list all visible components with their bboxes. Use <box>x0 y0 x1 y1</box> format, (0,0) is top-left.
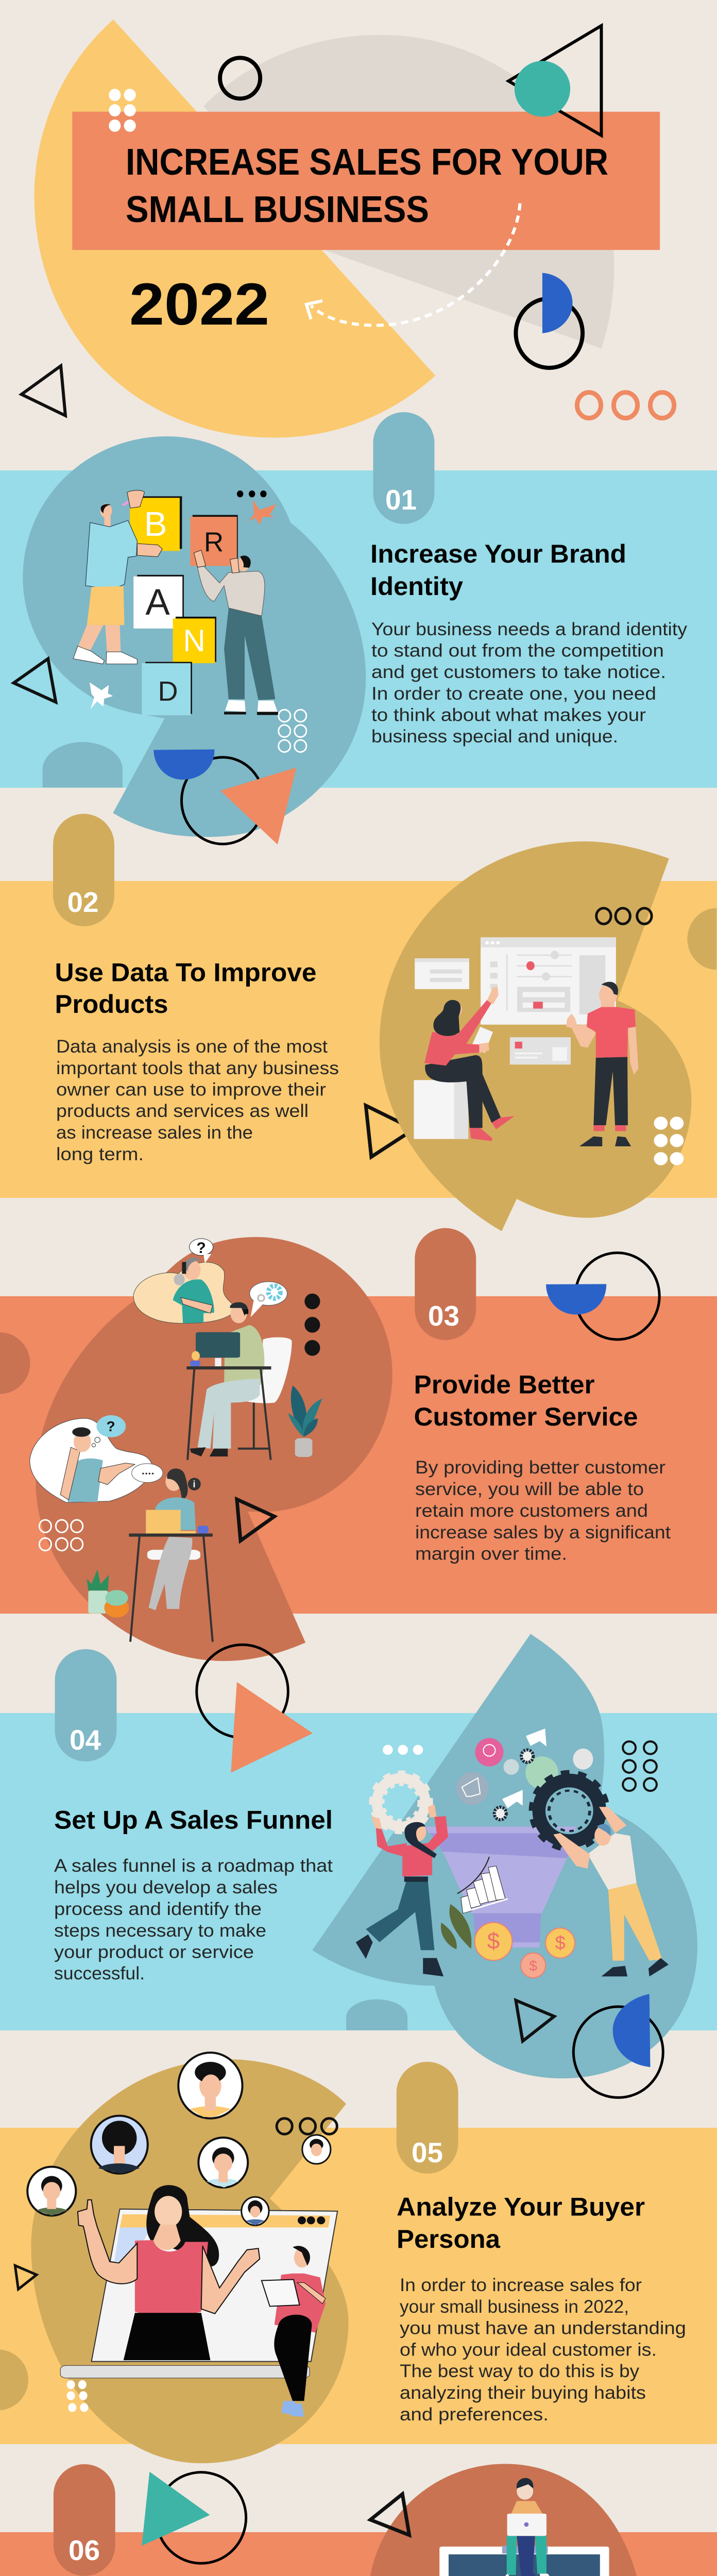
body text <box>400 2275 686 2425</box>
title: SMALL BUSINESS <box>126 189 429 230</box>
body text: to stand out from the competition <box>371 641 664 660</box>
body text: In order to increase sales for <box>400 2275 642 2295</box>
body text: products and services as well <box>56 1101 309 1121</box>
heading <box>397 2193 645 2253</box>
illustration: woman lifting gear <box>356 1804 448 1976</box>
heading: Use Data To Improve <box>55 958 316 987</box>
band: section 6 <box>0 2532 717 2576</box>
band: section 5 <box>0 2128 717 2444</box>
illustration: agent with laptop <box>87 1468 213 1642</box>
body text: increase sales by a significant <box>415 1522 671 1543</box>
speech bubble marks: i <box>193 1479 196 1489</box>
body text: and preferences. <box>400 2404 549 2425</box>
body text: your product or service <box>54 1942 254 1962</box>
letters on blocks: R <box>204 527 224 557</box>
number 06: 06 <box>69 2534 100 2566</box>
panel: section 4 sales funnel <box>54 1634 697 2097</box>
panel: section 3 customer service <box>0 1228 671 1661</box>
body text: successful. <box>54 1963 145 1984</box>
letters on blocks: D <box>158 676 178 707</box>
body text: to think about what makes your <box>371 705 646 725</box>
heading: Set Up A Sales Funnel <box>54 1805 333 1834</box>
heading: Identity <box>370 572 463 601</box>
body text: important tools that any business <box>56 1058 339 1078</box>
band: section 2 <box>0 881 717 1198</box>
heading: Products <box>55 990 168 1019</box>
number 03: 03 <box>428 1300 459 1332</box>
illustration: dashboard panels <box>414 937 616 1139</box>
illustration: funnel <box>425 1826 576 1947</box>
heading: Increase Your Brand <box>370 539 626 568</box>
band: section 4 <box>0 1713 717 2030</box>
section 5 shapes <box>0 2053 458 2463</box>
speech bubble marks: ? <box>106 1418 115 1434</box>
illustration: man lifting gear <box>553 1807 669 1976</box>
illustration: woman presenter <box>78 2185 260 2360</box>
number 01: 01 <box>385 484 417 516</box>
illustration: man holding letters <box>73 490 182 664</box>
icon: avatars <box>27 2053 331 2225</box>
body text: Your business needs a brand identity <box>371 619 688 639</box>
illustration: letter blocks <box>133 515 238 715</box>
letters on blocks <box>144 505 224 707</box>
body text: process and identify the <box>54 1899 262 1919</box>
body text <box>371 619 688 747</box>
body text: business special and unique. <box>371 726 618 747</box>
illustration: woman seated <box>424 987 515 1141</box>
body text <box>415 1458 671 1564</box>
illustration: man in sweater <box>194 550 278 715</box>
body text: In order to create one, you need <box>371 684 656 704</box>
coin dollar signs: $ <box>529 1958 537 1974</box>
body text: Data analysis is one of the most <box>56 1037 328 1057</box>
title <box>126 142 608 337</box>
illustration: older customer on phone <box>133 1239 238 1323</box>
speech bubble marks: ? <box>196 1240 206 1257</box>
body text: owner can use to improve their <box>56 1080 326 1099</box>
body text: of who your ideal customer is. <box>400 2340 657 2360</box>
body text: retain more customers and <box>415 1501 648 1521</box>
heading <box>55 958 316 1019</box>
body text: margin over time. <box>415 1544 567 1564</box>
section 6 shapes <box>54 2464 716 2576</box>
heading: Customer Service <box>414 1402 638 1431</box>
heading: Persona <box>397 2225 501 2253</box>
body text <box>54 1856 333 1984</box>
body text: service, you will be able to <box>415 1479 644 1499</box>
panel: section 6 marketing strategy <box>54 2464 716 2576</box>
panel: header <box>22 20 674 437</box>
illustration: laptop <box>60 2209 337 2378</box>
illustration: person on laptop <box>499 2478 556 2576</box>
letters on blocks: N <box>183 623 206 658</box>
body text: steps necessary to make <box>54 1921 266 1941</box>
illustration: tablet <box>439 2546 704 2576</box>
illustration: man standing <box>566 982 638 1146</box>
number 05: 05 <box>412 2137 443 2168</box>
body text: and get customers to take notice. <box>371 662 666 682</box>
section 1 shapes <box>14 412 434 844</box>
heading: Analyze Your Buyer <box>397 2193 645 2222</box>
heading <box>370 539 626 601</box>
illustration: floating icons <box>377 1728 599 1841</box>
body text: The best way to do this is by <box>400 2361 640 2381</box>
coin dollar signs: $ <box>487 1928 500 1954</box>
header shapes <box>22 20 674 437</box>
number 04: 04 <box>70 1724 101 1756</box>
heading: Provide Better <box>414 1370 594 1399</box>
body text: you must have an understanding <box>400 2318 686 2338</box>
coin dollar signs <box>487 1928 566 1974</box>
panel: section 5 buyer persona <box>0 2053 686 2463</box>
body text: By providing better customer <box>415 1458 665 1478</box>
section 4 shapes <box>55 1634 697 2097</box>
body text: analyzing their buying habits <box>400 2383 646 2403</box>
panel: section 2 data <box>53 814 716 1231</box>
speech bubble marks <box>106 1240 206 1489</box>
illustration: bar chart <box>457 1857 507 1913</box>
heading <box>414 1370 638 1431</box>
coin dollar signs: $ <box>555 1932 566 1953</box>
body text: helps you develop a sales <box>54 1877 278 1897</box>
body text: as increase sales in the <box>56 1123 253 1143</box>
body text: long term. <box>56 1144 144 1164</box>
title: INCREASE SALES FOR YOUR <box>126 142 608 183</box>
band: section 1 <box>0 470 717 788</box>
illustration: support agent at desk <box>186 1282 322 1460</box>
body text <box>56 1037 339 1164</box>
number 02: 02 <box>67 886 99 918</box>
body text: your small business in 2022, <box>400 2297 629 2317</box>
title: 2022 <box>129 272 269 337</box>
letters on blocks: A <box>145 582 170 623</box>
section 2 shapes <box>53 814 716 1231</box>
band: section 3 <box>0 1296 717 1614</box>
body text: A sales funnel is a roadmap that <box>54 1856 333 1876</box>
illustration: man with tablet <box>262 2246 326 2417</box>
section 3 shapes <box>0 1228 659 1661</box>
letters on blocks: B <box>144 505 167 544</box>
illustration: male customer on phone <box>30 1415 163 1502</box>
illustration: coins and leaves <box>441 1904 575 1978</box>
panel: section 1 brand identity <box>14 412 688 844</box>
